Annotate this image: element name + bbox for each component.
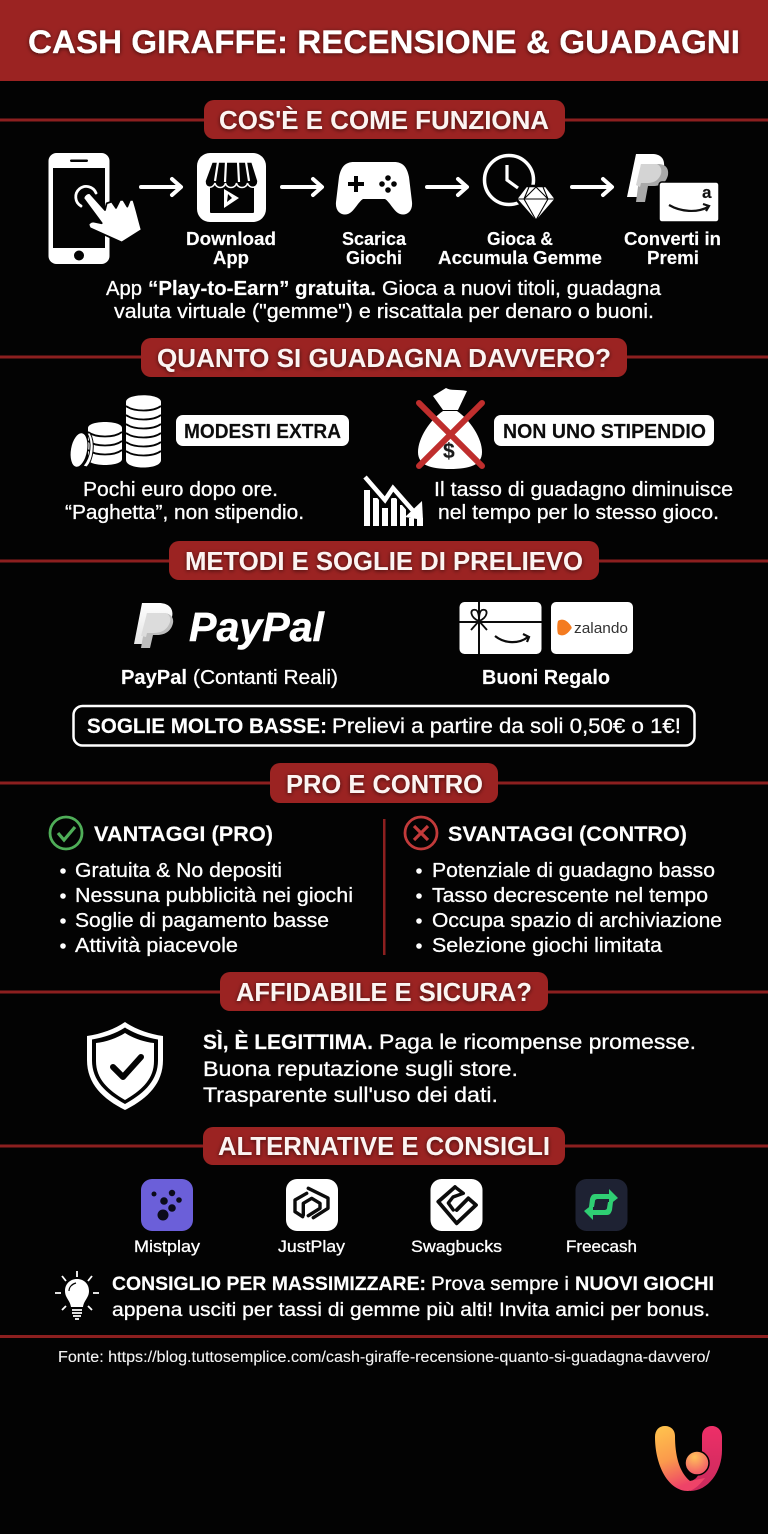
list: pros: Nessuna pubblicità nei giochi — [75, 885, 353, 907]
panel: pros and cons — [0, 763, 768, 957]
badge: non uno stipendio: NON UNO STIPENDIO — [503, 421, 706, 443]
label: download app: App — [213, 248, 249, 268]
list: pros — [60, 860, 353, 957]
text block: tip: CONSIGLIO PER MASSIMIZZARE: — [112, 1273, 426, 1295]
icon: game controller — [336, 162, 412, 214]
icon: coin stacks — [68, 395, 161, 469]
label: download app: Download — [186, 229, 276, 249]
heading: cons: SVANTAGGI (CONTRO) — [448, 823, 687, 846]
text block: description: valuta virtuale ("gemme") e riscattala per denaro o buoni. — [114, 301, 654, 323]
list: cons — [416, 860, 722, 957]
icon: check — [50, 817, 82, 849]
heading: pros and cons: PRO E CONTRO — [286, 769, 483, 799]
callout: low thresholds: SOGLIE MOLTO BASSE: — [87, 715, 327, 738]
badge: modesti extra — [176, 415, 349, 446]
arrow — [427, 179, 467, 195]
text block: tip: Prova sempre i — [431, 1273, 569, 1295]
text block: description: App — [106, 278, 142, 300]
icon: zalando gift card: zalando — [574, 620, 628, 637]
panel: how it works — [0, 100, 768, 323]
icon: mistplay — [141, 1179, 193, 1231]
heading: pros: VANTAGGI (PRO) — [94, 823, 273, 846]
label: download app — [186, 229, 276, 268]
icon: falling chart — [364, 477, 423, 526]
label: converti in premi: Premi — [647, 248, 699, 268]
callout: low thresholds: Prelievi a partire da soli 0,50€ o 1€! — [332, 715, 681, 738]
text block: decreasing rate: nel tempo per lo stesso gioco. — [438, 502, 719, 524]
text block: legit — [203, 1031, 696, 1107]
label: gioca e accumula gemme: Accumula Gemme — [438, 248, 602, 268]
panel: withdrawal methods — [0, 541, 768, 746]
label: scarica giochi — [342, 229, 407, 268]
text block: decreasing rate: Il tasso di guadagno diminuisce — [434, 479, 733, 501]
icon: light bulb — [55, 1271, 99, 1319]
text block: tip — [112, 1273, 714, 1321]
icon: paypal and amazon voucher — [627, 154, 719, 222]
text block: pocket money: Pochi euro dopo ore. — [83, 479, 278, 501]
source line: Fonte: https://blog.tuttosemplice.com/cash-giraffe-recensione-quanto-si-guadagna-davvero/ — [58, 1349, 711, 1366]
label: justplay: JustPlay — [278, 1238, 346, 1256]
heading: how it works: COS'È E COME FUNZIONA — [219, 105, 549, 135]
label: paypal cash: PayPal — [121, 667, 187, 689]
text block: tip: appena usciti per tassi di gemme più alti! Invita amici per bonus. — [112, 1299, 710, 1321]
label: paypal cash — [121, 667, 338, 689]
list: pros: Attività piacevole — [75, 935, 238, 957]
arrow — [572, 179, 612, 195]
panel: earnings — [0, 338, 768, 526]
text block: decreasing rate — [434, 479, 733, 524]
label: gift cards: Buoni Regalo — [482, 667, 610, 689]
icon: phone with tapping hand — [48, 153, 142, 264]
heading: safety: AFFIDABILE E SICURA? — [236, 977, 532, 1007]
list: cons: Potenziale di guadagno basso — [432, 860, 715, 882]
heading: earnings: QUANTO SI GUADAGNA DAVVERO? — [157, 343, 611, 373]
heading: alternatives: ALTERNATIVE E CONSIGLI — [218, 1131, 550, 1161]
logo: paypal: PayPal — [189, 604, 326, 650]
icon: swagbucks — [430, 1179, 482, 1231]
text block: description: “Play-to-Earn” gratuita. — [148, 278, 376, 300]
list: cons: Selezione giochi limitata — [432, 935, 663, 957]
title banner — [0, 0, 768, 81]
callout: low thresholds — [74, 706, 694, 746]
icon: paypal and amazon voucher: a — [702, 183, 712, 202]
list: pros: Soglie di pagamento basse — [75, 910, 329, 932]
arrow — [282, 179, 322, 195]
label: gioca e accumula gemme — [438, 229, 602, 268]
logo: brand mark — [655, 1426, 722, 1491]
icon: money bag crossed out — [418, 388, 482, 469]
text block: legit: Paga le ricompense promesse. — [379, 1031, 696, 1054]
icon: freecash — [576, 1179, 628, 1231]
arrow — [141, 179, 181, 195]
icon: cross — [405, 817, 437, 849]
list: cons: Tasso decrescente nel tempo — [432, 885, 708, 907]
icon: shield — [87, 1022, 163, 1110]
text block: legit: Buona reputazione sugli store. — [203, 1058, 518, 1081]
text block: description — [106, 278, 662, 323]
label: freecash: Freecash — [566, 1238, 637, 1256]
label: scarica giochi: Scarica — [342, 229, 407, 249]
text block: tip: NUOVI GIOCHI — [575, 1273, 714, 1295]
panel: safety — [0, 972, 768, 1110]
label: converti in premi: Converti in — [624, 229, 721, 249]
label: mistplay: Mistplay — [134, 1238, 201, 1256]
list: pros: Gratuita & No depositi — [75, 860, 282, 882]
label: swagbucks: Swagbucks — [411, 1238, 502, 1256]
text block: legit: SÌ, È LEGITTIMA. — [203, 1031, 373, 1054]
badge: modesti extra: MODESTI EXTRA — [184, 421, 341, 443]
icon: money bag crossed out: $ — [443, 440, 455, 463]
icon: clock and gem — [484, 156, 556, 222]
icon: app store — [197, 153, 266, 222]
label: scarica giochi: Giochi — [346, 248, 402, 268]
icon: justplay — [286, 1179, 338, 1231]
text block: legit: Trasparente sull'uso dei dati. — [203, 1084, 498, 1107]
icon: amazon gift card — [460, 602, 542, 654]
logo: paypal — [134, 603, 326, 650]
heading: withdrawal methods: METODI E SOGLIE DI PRELIEVO — [185, 546, 583, 576]
title: CASH GIRAFFE: RECENSIONE & GUADAGNI — [28, 24, 740, 60]
icon: zalando gift card — [551, 602, 633, 654]
badge: non uno stipendio — [494, 415, 714, 446]
list: cons: Occupa spazio di archiviazione — [432, 910, 722, 932]
label: converti in premi — [624, 229, 721, 268]
heading: pros and cons — [270, 763, 498, 803]
text block: pocket money: “Paghetta”, non stipendio. — [65, 502, 304, 524]
text block: pocket money — [65, 479, 304, 524]
panel: alternatives and tips — [0, 1127, 768, 1321]
label: gioca e accumula gemme: Gioca & — [487, 229, 553, 249]
label: paypal cash: (Contanti Reali) — [193, 667, 338, 689]
text block: description: Gioca a nuovi titoli, guadagna — [382, 278, 662, 300]
